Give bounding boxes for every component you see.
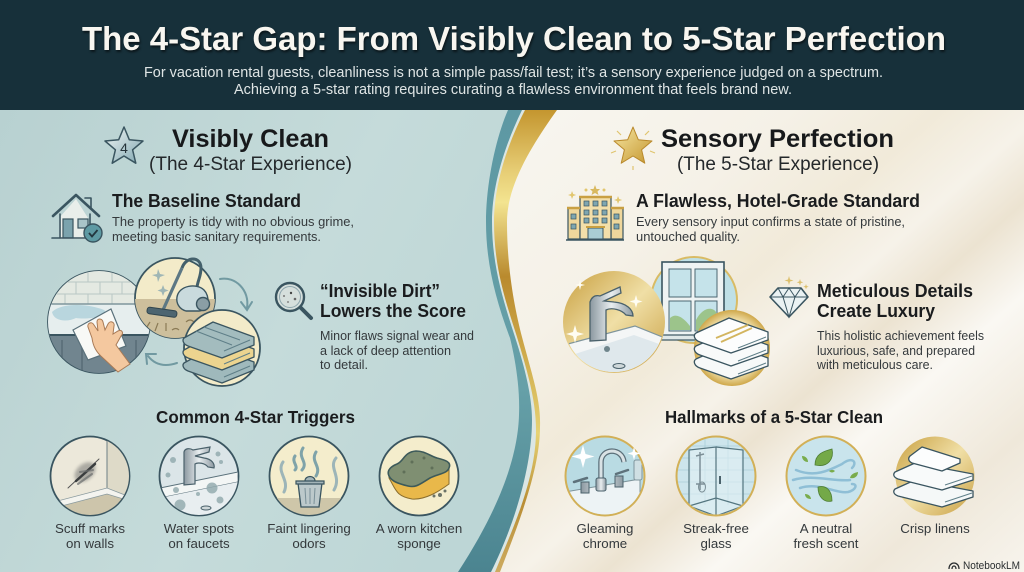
meticulous details text: This holistic achievement feels [817,328,984,343]
label: gleaming chrome: Gleaming [577,521,633,536]
circle: faucet and sink [563,271,665,380]
circle: window [651,257,737,343]
trigger: water spots [160,436,238,520]
teal wave band [458,110,600,572]
circle: wiping counter [47,270,151,375]
hallmark: neutral fresh scent [786,436,866,516]
hotel grade text: Every sensory input confirms a state of pristine, [636,214,905,229]
right panel heading: (The 5-Star Experience) [677,154,879,175]
label: scuff marks: Scuff marks [55,521,125,536]
label: worn sponge [376,521,462,551]
right panel heading [661,125,894,175]
label: streak-free glass [683,521,749,551]
invisible dirt text: “Invisible Dirt” [320,280,440,301]
illustration: cleaning circles [47,258,260,386]
meticulous details text: with meticulous care. [816,357,933,372]
hotel grade text [636,190,920,244]
label: neutral fresh scent: A neutral [800,521,852,536]
subtitle [144,65,883,98]
hotel grade text: untouched quality. [636,229,740,244]
hallmark: streak-free glass [676,436,756,516]
trigger: scuff marks [50,436,132,520]
baseline standard text: The property is tidy with no obvious grime, [112,214,354,229]
label: neutral fresh scent [793,521,859,551]
label: faint odors [267,521,351,551]
trigger: worn sponge [380,436,458,516]
pale wave line [491,110,600,572]
invisible dirt text: to detail. [320,357,368,372]
icon: diamond [770,276,809,317]
invisible dirt text: a lack of deep attention [320,343,451,358]
arrow: top cycle [220,279,252,310]
invisible dirt text: Lowers the Score [320,300,466,321]
label: streak-free glass: glass [700,536,732,551]
left panel heading [149,125,352,175]
circle: vacuum [135,258,215,339]
right panel heading: Sensory Perfection [661,125,894,153]
label: water spots [164,521,235,551]
title: The 4-Star Gap: From Visibly Clean to 5-Star Perfection [82,20,946,57]
right panel background [500,110,1024,572]
label: worn sponge: sponge [397,536,441,551]
circle: white towels [694,310,770,386]
triggers heading: Common 4-Star Triggers [156,407,355,427]
gold wave band [494,110,620,572]
icon: gold star [611,127,655,170]
panel: sensory perfection [563,125,984,551]
left panel heading: (The 4-Star Experience) [149,154,352,175]
icon: house with check [52,195,102,242]
arrow: bottom cycle [146,354,177,365]
subtitle: For vacation rental guests, cleanliness is not a simple pass/fail test; it’s a sensory experience judged on a spectrum. [144,65,883,81]
label: gleaming chrome: chrome [583,536,627,551]
icon: magnifier [276,283,311,318]
left panel background [0,110,560,572]
hotel grade text: A Flawless, Hotel-Grade Standard [636,190,920,211]
label: scuff marks: on walls [66,536,114,551]
meticulous details text: Meticulous Details [817,280,973,301]
label: streak-free glass: Streak-free [683,521,749,536]
icon: 4 star badge: 4 [120,140,128,156]
trigger: faint odors [268,436,350,518]
label: crisp linens: Crisp linens [900,521,970,536]
panel: visibly clean [47,125,474,551]
label: water spots: Water spots [164,521,235,536]
meticulous details text [816,280,984,372]
label: neutral fresh scent: fresh scent [793,536,859,551]
illustration: pristine circles [563,257,770,386]
meticulous details text: luxurious, safe, and prepared [817,343,975,358]
subtitle: Achieving a 5-star rating requires curating a flawless environment that feels brand new. [234,82,792,98]
left panel heading: Visibly Clean [172,125,329,153]
invisible dirt text [320,280,474,372]
hallmark: gleaming chrome [565,436,644,520]
icon: hotel [566,185,624,240]
header band [0,0,1024,110]
baseline standard text: The Baseline Standard [112,190,301,211]
hallmarks heading: Hallmarks of a 5-Star Clean [665,407,883,427]
label: faint odors: odors [292,536,326,551]
notebooklm mark: NotebookLM [963,560,1020,572]
label: scuff marks [55,521,125,551]
icon: 4 star badge [105,127,143,163]
label: worn sponge: A worn kitchen [376,521,462,536]
hallmark: crisp linens [894,436,974,516]
invisible dirt text: Minor flaws signal wear and [320,328,474,343]
label: faint odors: Faint lingering [267,521,351,536]
label: water spots: on faucets [168,536,230,551]
meticulous details text: Create Luxury [817,300,936,321]
baseline standard text: meeting basic sanitary requirements. [112,229,321,244]
circle: stacked towels [183,310,260,386]
label: gleaming chrome [577,521,633,551]
baseline standard text [112,190,354,244]
